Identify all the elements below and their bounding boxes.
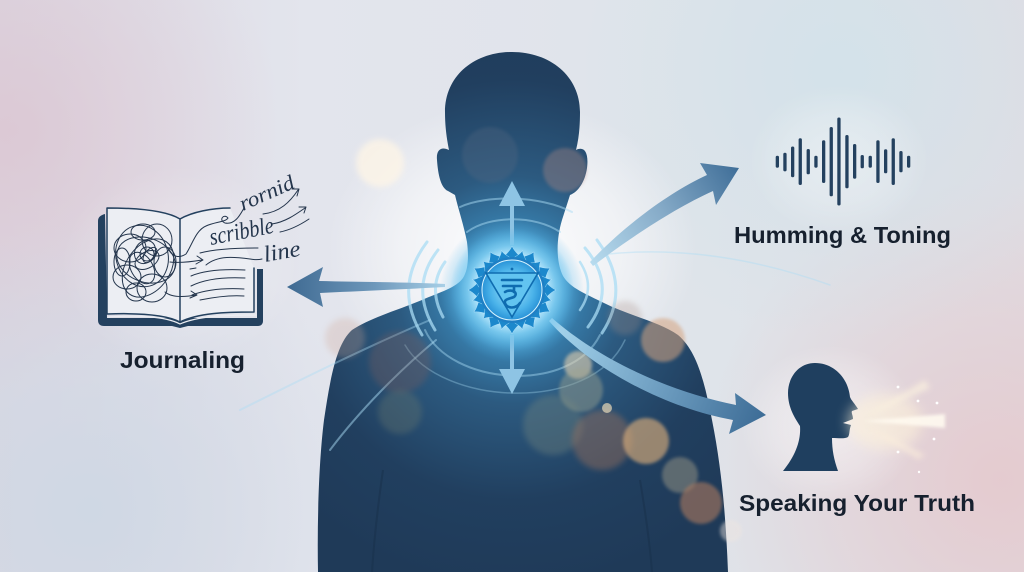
- label: journaling: Journaling: [120, 347, 245, 373]
- chakra disc: [479, 257, 545, 323]
- light beams from mouth: [847, 380, 945, 473]
- book cover: [98, 214, 263, 328]
- energy rings: [240, 199, 830, 450]
- handwritten word: scribble: scribble: [207, 213, 276, 251]
- handwritten word: line: line: [262, 236, 302, 267]
- body silhouette: [318, 52, 728, 572]
- bokeh lights: [325, 127, 742, 542]
- handwritten word: rornid: rornid: [235, 170, 299, 216]
- arrow: down: [499, 335, 525, 394]
- label: speaking your truth: Speaking Your Truth: [739, 490, 975, 516]
- tangled scribble: [109, 219, 184, 307]
- speaking head icon: [783, 363, 858, 471]
- throat glow: [440, 218, 584, 362]
- arrow: up: [499, 181, 525, 245]
- scribble flow lines: [165, 189, 309, 300]
- arrow: left to journaling: [287, 267, 445, 307]
- book pages: [107, 208, 254, 322]
- chakra symbol: [450, 228, 574, 352]
- chakra petals: [468, 246, 556, 334]
- chakra triangle: [486, 273, 538, 317]
- sound wave icon: [776, 118, 910, 206]
- chakra emblem: [502, 268, 522, 308]
- arrow: up right to humming: [590, 163, 739, 266]
- arm gaps: [372, 470, 652, 572]
- arrow: down right to speaking: [549, 318, 766, 434]
- journaling book icon: [98, 170, 309, 328]
- label: humming and toning: Humming & Toning: [734, 222, 951, 248]
